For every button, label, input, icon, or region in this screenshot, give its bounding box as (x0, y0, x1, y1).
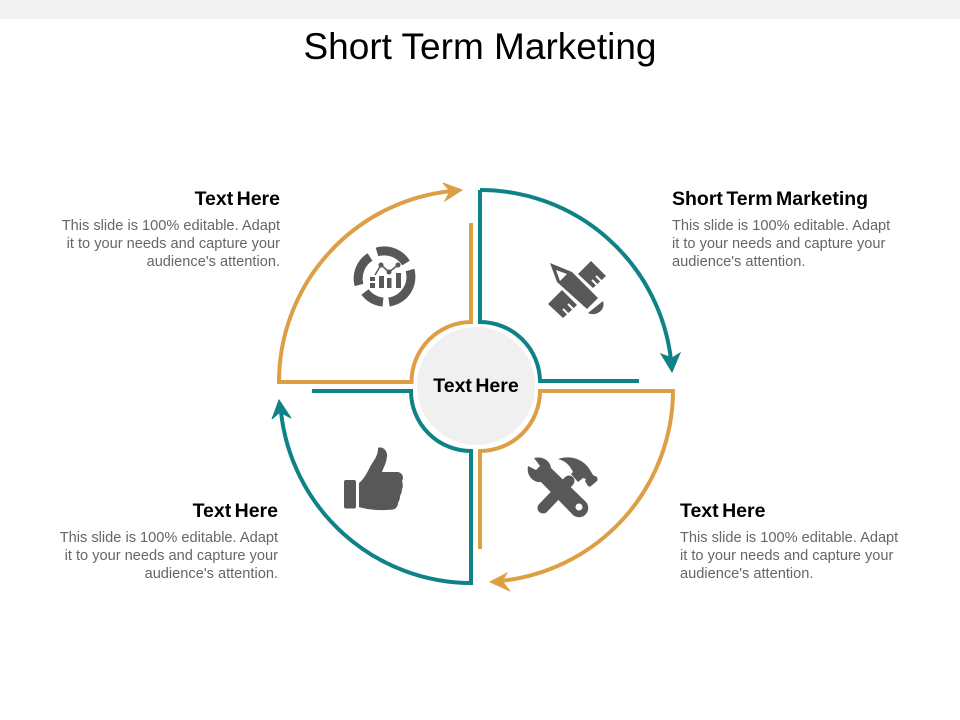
body: bottom right: This slide is 100% editable. Adapt (680, 530, 898, 546)
icon: chart in ring (358, 251, 411, 302)
panel outline: top left with arrow (279, 183, 471, 382)
body: top left: This slide is 100% editable. Adapt (62, 218, 280, 234)
panel outline: bottom left with arrow (272, 391, 471, 583)
icon: pencil and ruler (548, 261, 606, 318)
heading: bottom left: Text Here (193, 500, 278, 522)
title: Short Term Marketing (304, 26, 656, 67)
text block: top right (672, 188, 890, 270)
panel outline: top right with arrow (480, 190, 680, 381)
body: bottom right (680, 530, 898, 582)
heading: top left: Text Here (195, 188, 280, 210)
icon: thumbs up (344, 447, 403, 510)
panel outline: bottom right with arrow (480, 391, 673, 591)
text block: bottom left (60, 500, 278, 582)
body: bottom right: it to your needs and capture your (680, 548, 893, 564)
body: bottom left (60, 530, 278, 582)
body: top right: This slide is 100% editable. Adapt (672, 218, 890, 234)
centre circle (417, 327, 535, 445)
body: top right (672, 218, 890, 270)
body: bottom left: audience's attention. (145, 566, 278, 582)
body: bottom left: it to your needs and capture your (65, 548, 278, 564)
centre label: Text Here (433, 375, 519, 397)
body: bottom right: audience's attention. (680, 566, 813, 582)
heading: bottom right: Text Here (680, 500, 765, 522)
top band (0, 0, 960, 19)
body: top right: audience's attention. (672, 254, 805, 270)
body: top left (62, 218, 280, 270)
body: bottom left: This slide is 100% editable. Adapt (60, 530, 278, 546)
body: top left: it to your needs and capture your (67, 236, 280, 252)
body: top right: it to your needs and capture your (672, 236, 885, 252)
icon: wrench and hammer (528, 457, 598, 517)
heading: top right: Short Term Marketing (672, 188, 868, 210)
text block: top left (62, 188, 280, 270)
text block: bottom right (680, 500, 898, 582)
body: top left: audience's attention. (147, 254, 280, 270)
